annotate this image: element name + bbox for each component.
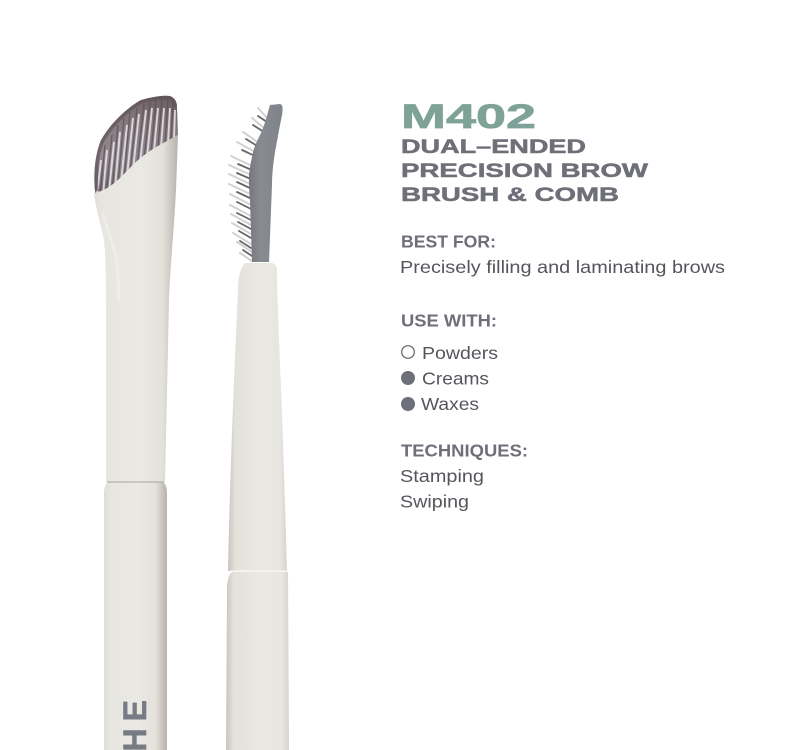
section: use with: Waxes [421,394,479,414]
icon: filled circle creams [401,371,415,385]
comb: spoolie brow comb [226,104,289,750]
heading: product name: BRUSH & COMB [401,185,619,206]
section: techniques: Stamping [400,466,484,486]
section: techniques: Swiping [400,492,469,512]
section: techniques [400,440,528,512]
heading: product name [401,137,648,206]
comb blade [249,104,283,262]
section: techniques: TECHNIQUES: [401,440,528,460]
section: use with: Creams [422,368,489,388]
brush: angled brow brush [90,90,182,750]
comb teeth [229,108,267,261]
title: product code: M402 [401,98,536,136]
comb lower handle [226,572,289,750]
heading: product name: PRECISION BROW [401,161,648,182]
section: use with: USE WITH: [401,310,497,330]
section: use with: Powders [422,343,498,363]
icon: filled circle waxes [401,397,415,411]
brush ferrule [94,135,178,482]
brush lower handle [104,482,167,750]
brush bristles [94,96,178,193]
section: best for [400,232,725,277]
section: use with [401,310,498,414]
icon: empty circle powders [402,346,414,358]
comb upper handle [228,263,287,571]
heading: product name: DUAL–ENDED [401,137,586,158]
section: best for: Precisely filling and laminating brows [400,257,725,277]
section: best for: BEST FOR: [401,232,496,252]
